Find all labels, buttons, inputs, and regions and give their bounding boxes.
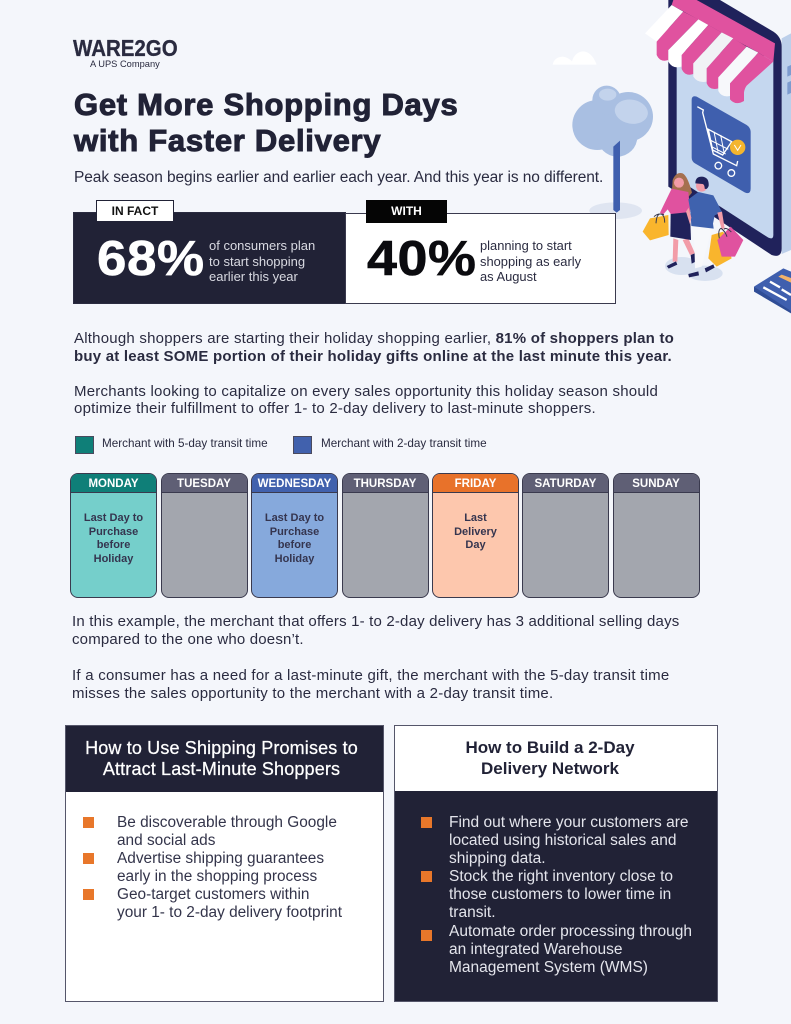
- title: [73, 87, 458, 158]
- bullet: [83, 889, 94, 900]
- bullet list: shipping data.: [449, 850, 546, 867]
- panel heading: Attract Last-Minute Shoppers: [103, 758, 340, 778]
- woman: [672, 173, 692, 197]
- intro text: Peak season begins earlier and earlier each year. And this year is no different.: [74, 169, 603, 186]
- bullet list: an integrated Warehouse: [449, 941, 622, 958]
- paragraph: example: In this example, the merchant that offers 1- to 2-day delivery has 3 additional selling days: [72, 613, 679, 630]
- logo: WARE2GO: [73, 35, 178, 61]
- bullet list: your 1- to 2-day delivery footprint: [117, 904, 342, 921]
- bullet list: Management System (WMS): [449, 959, 648, 976]
- panel: 40% stat: [345, 213, 616, 304]
- legend: [75, 436, 487, 454]
- stat number: 40%: [367, 232, 477, 286]
- icon: shopping cart: [697, 107, 745, 176]
- paragraph: last minute: [74, 330, 674, 365]
- bullet list: Automate order processing through: [449, 923, 692, 940]
- bullet: [83, 853, 94, 864]
- stat description: as August: [480, 269, 537, 284]
- bullet list: Geo-target customers within: [117, 886, 309, 903]
- awning: [645, 0, 775, 103]
- day: monday: before: [97, 539, 130, 551]
- paragraph: last minute: buy at least SOME portion of their holiday gifts online at the last minute this year.: [74, 348, 672, 365]
- day: wednesday: before: [278, 539, 311, 551]
- shadows: [665, 257, 698, 275]
- day: thursday: [342, 473, 428, 598]
- panel: shipping promises: [65, 725, 384, 1002]
- day: friday: FRIDAY: [455, 478, 496, 490]
- title: with Faster Delivery: [74, 123, 381, 158]
- day: wednesday: WEDNESDAY: [258, 478, 331, 490]
- paragraph: example: [72, 613, 679, 648]
- day: wednesday: Last Day to: [265, 512, 324, 524]
- tag: with: [366, 200, 447, 223]
- bullet list: Advertise shipping guarantees: [117, 850, 324, 867]
- calendar: [70, 473, 700, 598]
- cloud: [553, 51, 597, 65]
- panel heading: [395, 726, 717, 791]
- tree: [572, 86, 653, 219]
- stat description: planning to start: [480, 238, 572, 253]
- tag: with: WITH: [391, 204, 422, 218]
- bullet: [421, 930, 432, 941]
- paragraph: merchants: [74, 382, 658, 417]
- panel heading: [66, 726, 383, 792]
- day: friday: [432, 473, 519, 598]
- bullet list: Be discoverable through Google: [117, 814, 337, 831]
- day: wednesday: Purchase: [270, 526, 319, 538]
- bullet list: Stock the right inventory close to: [449, 868, 673, 885]
- stat description: of consumers plan: [209, 238, 315, 253]
- illustration: phone storefront with shoppers: [553, 0, 791, 314]
- bullet: [421, 871, 432, 882]
- day: wednesday: [251, 473, 338, 598]
- paragraph: last-minute gift: misses the sales opportunity to the merchant with a 2-day transit time.: [72, 684, 553, 702]
- day: monday: MONDAY: [88, 478, 139, 490]
- panel: 68% stat: [73, 212, 346, 304]
- tag: in fact: IN FACT: [112, 204, 158, 218]
- day: monday: Last Day to: [84, 512, 143, 524]
- bullet list: and social ads: [117, 832, 215, 849]
- tag: in fact: [96, 200, 174, 222]
- legend swatch: 2-day: [293, 436, 312, 454]
- paragraph: merchants: Merchants looking to capitalize on every sales opportunity this holiday season should: [74, 382, 658, 400]
- day: tuesday: [160, 473, 248, 598]
- day: sunday: [612, 473, 700, 598]
- bullet: [421, 817, 432, 828]
- bullet list: located using historical sales and: [449, 832, 676, 849]
- bullet list: early in the shopping process: [117, 868, 317, 885]
- logo: A UPS Company: [90, 59, 160, 69]
- stat description: [480, 238, 581, 284]
- day: thursday: THURSDAY: [354, 478, 416, 490]
- panel heading: How to Use Shipping Promises to: [85, 738, 358, 758]
- day: saturday: SATURDAY: [534, 478, 596, 490]
- bullet list: those customers to lower time in: [449, 886, 671, 903]
- panel heading: How to Build a 2-Day: [465, 738, 635, 757]
- shopping bags: [643, 215, 669, 240]
- man: [692, 225, 713, 268]
- paragraph: merchants: optimize their fulfillment to offer 1- to 2-day delivery to last-minute shoppers.: [74, 400, 596, 417]
- day: monday: Purchase: [89, 526, 138, 538]
- stat description: [209, 238, 315, 284]
- phone: [668, 0, 791, 256]
- day: friday: Day: [465, 539, 486, 551]
- day: monday: Holiday: [94, 553, 133, 565]
- paragraph: example: compared to the one who doesn’t.: [72, 630, 304, 648]
- bullet list: Find out where your customers are: [449, 814, 688, 831]
- day: friday: Delivery: [454, 526, 497, 538]
- paragraph: last minute: Although shoppers are starting their holiday shopping earlier, 81% of shoppers plan to: [74, 330, 674, 347]
- shoppers: [643, 173, 743, 281]
- stat description: earlier this year: [209, 269, 298, 284]
- stat description: shopping as early: [480, 254, 581, 268]
- panel heading: Delivery Network: [481, 758, 619, 778]
- bullet list: [449, 814, 692, 976]
- panel: 2-day network: [394, 725, 718, 1002]
- credit card: [754, 268, 791, 313]
- title: Get More Shopping Days: [74, 87, 458, 122]
- day: monday: [70, 473, 157, 598]
- paragraph: last-minute gift: If a consumer has a need for a last-minute gift, the merchant with the 5-day transit time: [72, 667, 669, 684]
- day: tuesday: TUESDAY: [177, 478, 231, 490]
- stat description: to start shopping: [209, 254, 305, 268]
- day: saturday: [522, 473, 609, 598]
- day: sunday: SUNDAY: [632, 478, 680, 490]
- paragraph: last-minute gift: [72, 667, 669, 702]
- bullet list: transit.: [449, 904, 496, 921]
- stat number: 68%: [97, 232, 205, 286]
- legend swatch: 5-day: [75, 436, 94, 454]
- day: friday: Last: [464, 512, 487, 524]
- bullet list: [117, 814, 342, 921]
- legend label: 2-day: Merchant with 2-day transit time: [321, 437, 487, 450]
- day: wednesday: Holiday: [275, 553, 314, 565]
- bullet: [83, 817, 94, 828]
- legend label: 5-day: Merchant with 5-day transit time: [102, 437, 268, 450]
